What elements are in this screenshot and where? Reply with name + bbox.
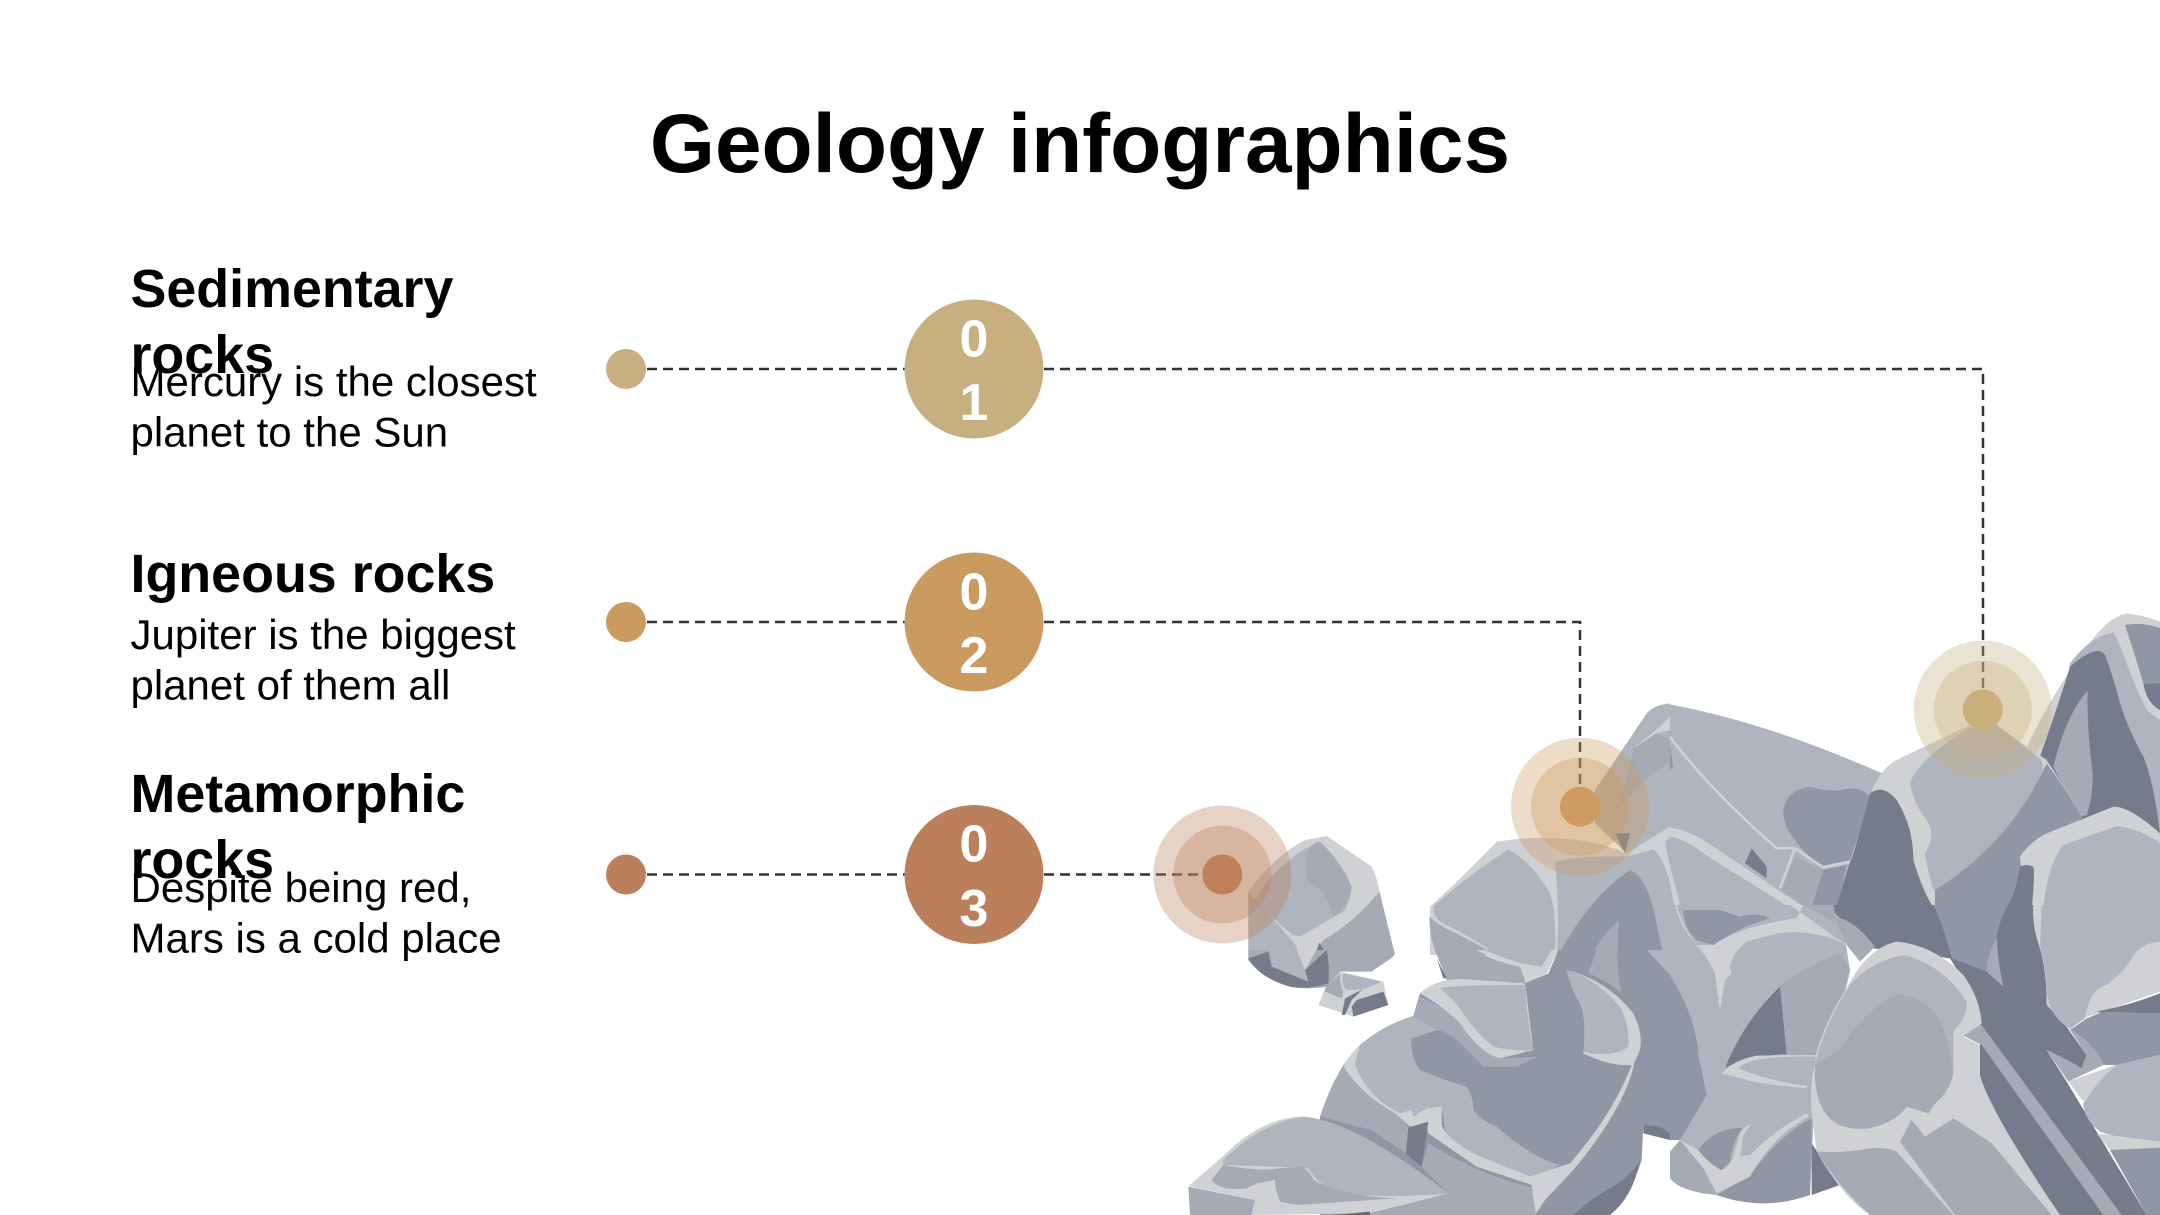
rocks: lower right section bbox=[1670, 905, 2160, 1215]
marker dot: row 1 bbox=[606, 349, 646, 389]
number badge: 02: 0 bbox=[960, 564, 988, 622]
illustration: pile of grey rocks bbox=[1188, 613, 2160, 1215]
text block: Metamorphic rocks bbox=[130, 764, 502, 962]
connector: row 2 bbox=[647, 622, 1580, 797]
target marker: row 1 bbox=[1914, 640, 2052, 778]
text block: Metamorphic rocks: rocks bbox=[130, 830, 274, 890]
rocks: upper right section bbox=[1670, 613, 2160, 905]
title: Geology infographics bbox=[650, 96, 1510, 190]
rocks: upper left section with small boulder bbox=[1248, 703, 1670, 955]
rocks: lower left section bbox=[1188, 950, 1670, 1215]
marker dot: row 2 bbox=[606, 602, 646, 642]
text block: Igneous rocks: Igneous rocks bbox=[130, 544, 495, 604]
number badge: 03 bbox=[904, 805, 1044, 944]
number badge: 01: 0 bbox=[960, 310, 988, 368]
number badge: 03: 3 bbox=[960, 880, 988, 938]
text block: Sedimentary rocks: Mercury is the closest bbox=[130, 358, 537, 405]
number badge: 03: 0 bbox=[960, 816, 988, 874]
text block: Metamorphic rocks: Metamorphic bbox=[130, 764, 465, 824]
text block: Igneous rocks bbox=[130, 544, 516, 708]
text block: Igneous rocks: planet of them all bbox=[130, 662, 450, 708]
text block: Metamorphic rocks: Mars is a cold place bbox=[130, 914, 502, 962]
number badge: 01: 1 bbox=[960, 374, 988, 432]
text block: Sedimentary rocks: planet to the Sun bbox=[130, 408, 448, 456]
text block: Metamorphic rocks: Despite being red, bbox=[130, 864, 471, 911]
number badge: 02 bbox=[904, 552, 1044, 692]
connector: row 1 bbox=[647, 369, 1983, 700]
text block: Sedimentary rocks: Sedimentary bbox=[130, 259, 453, 319]
text block: Sedimentary rocks bbox=[130, 259, 537, 456]
text block: Igneous rocks: Jupiter is the biggest bbox=[130, 611, 516, 658]
marker dot: row 3 bbox=[606, 854, 646, 894]
target marker: row 3 bbox=[1153, 806, 1291, 944]
number badge: 02: 2 bbox=[960, 627, 988, 685]
text block: Sedimentary rocks: rocks bbox=[130, 325, 274, 385]
target marker: row 2 bbox=[1511, 738, 1649, 876]
connector: row 3 bbox=[647, 873, 1215, 876]
number badge: 01 bbox=[904, 300, 1044, 438]
